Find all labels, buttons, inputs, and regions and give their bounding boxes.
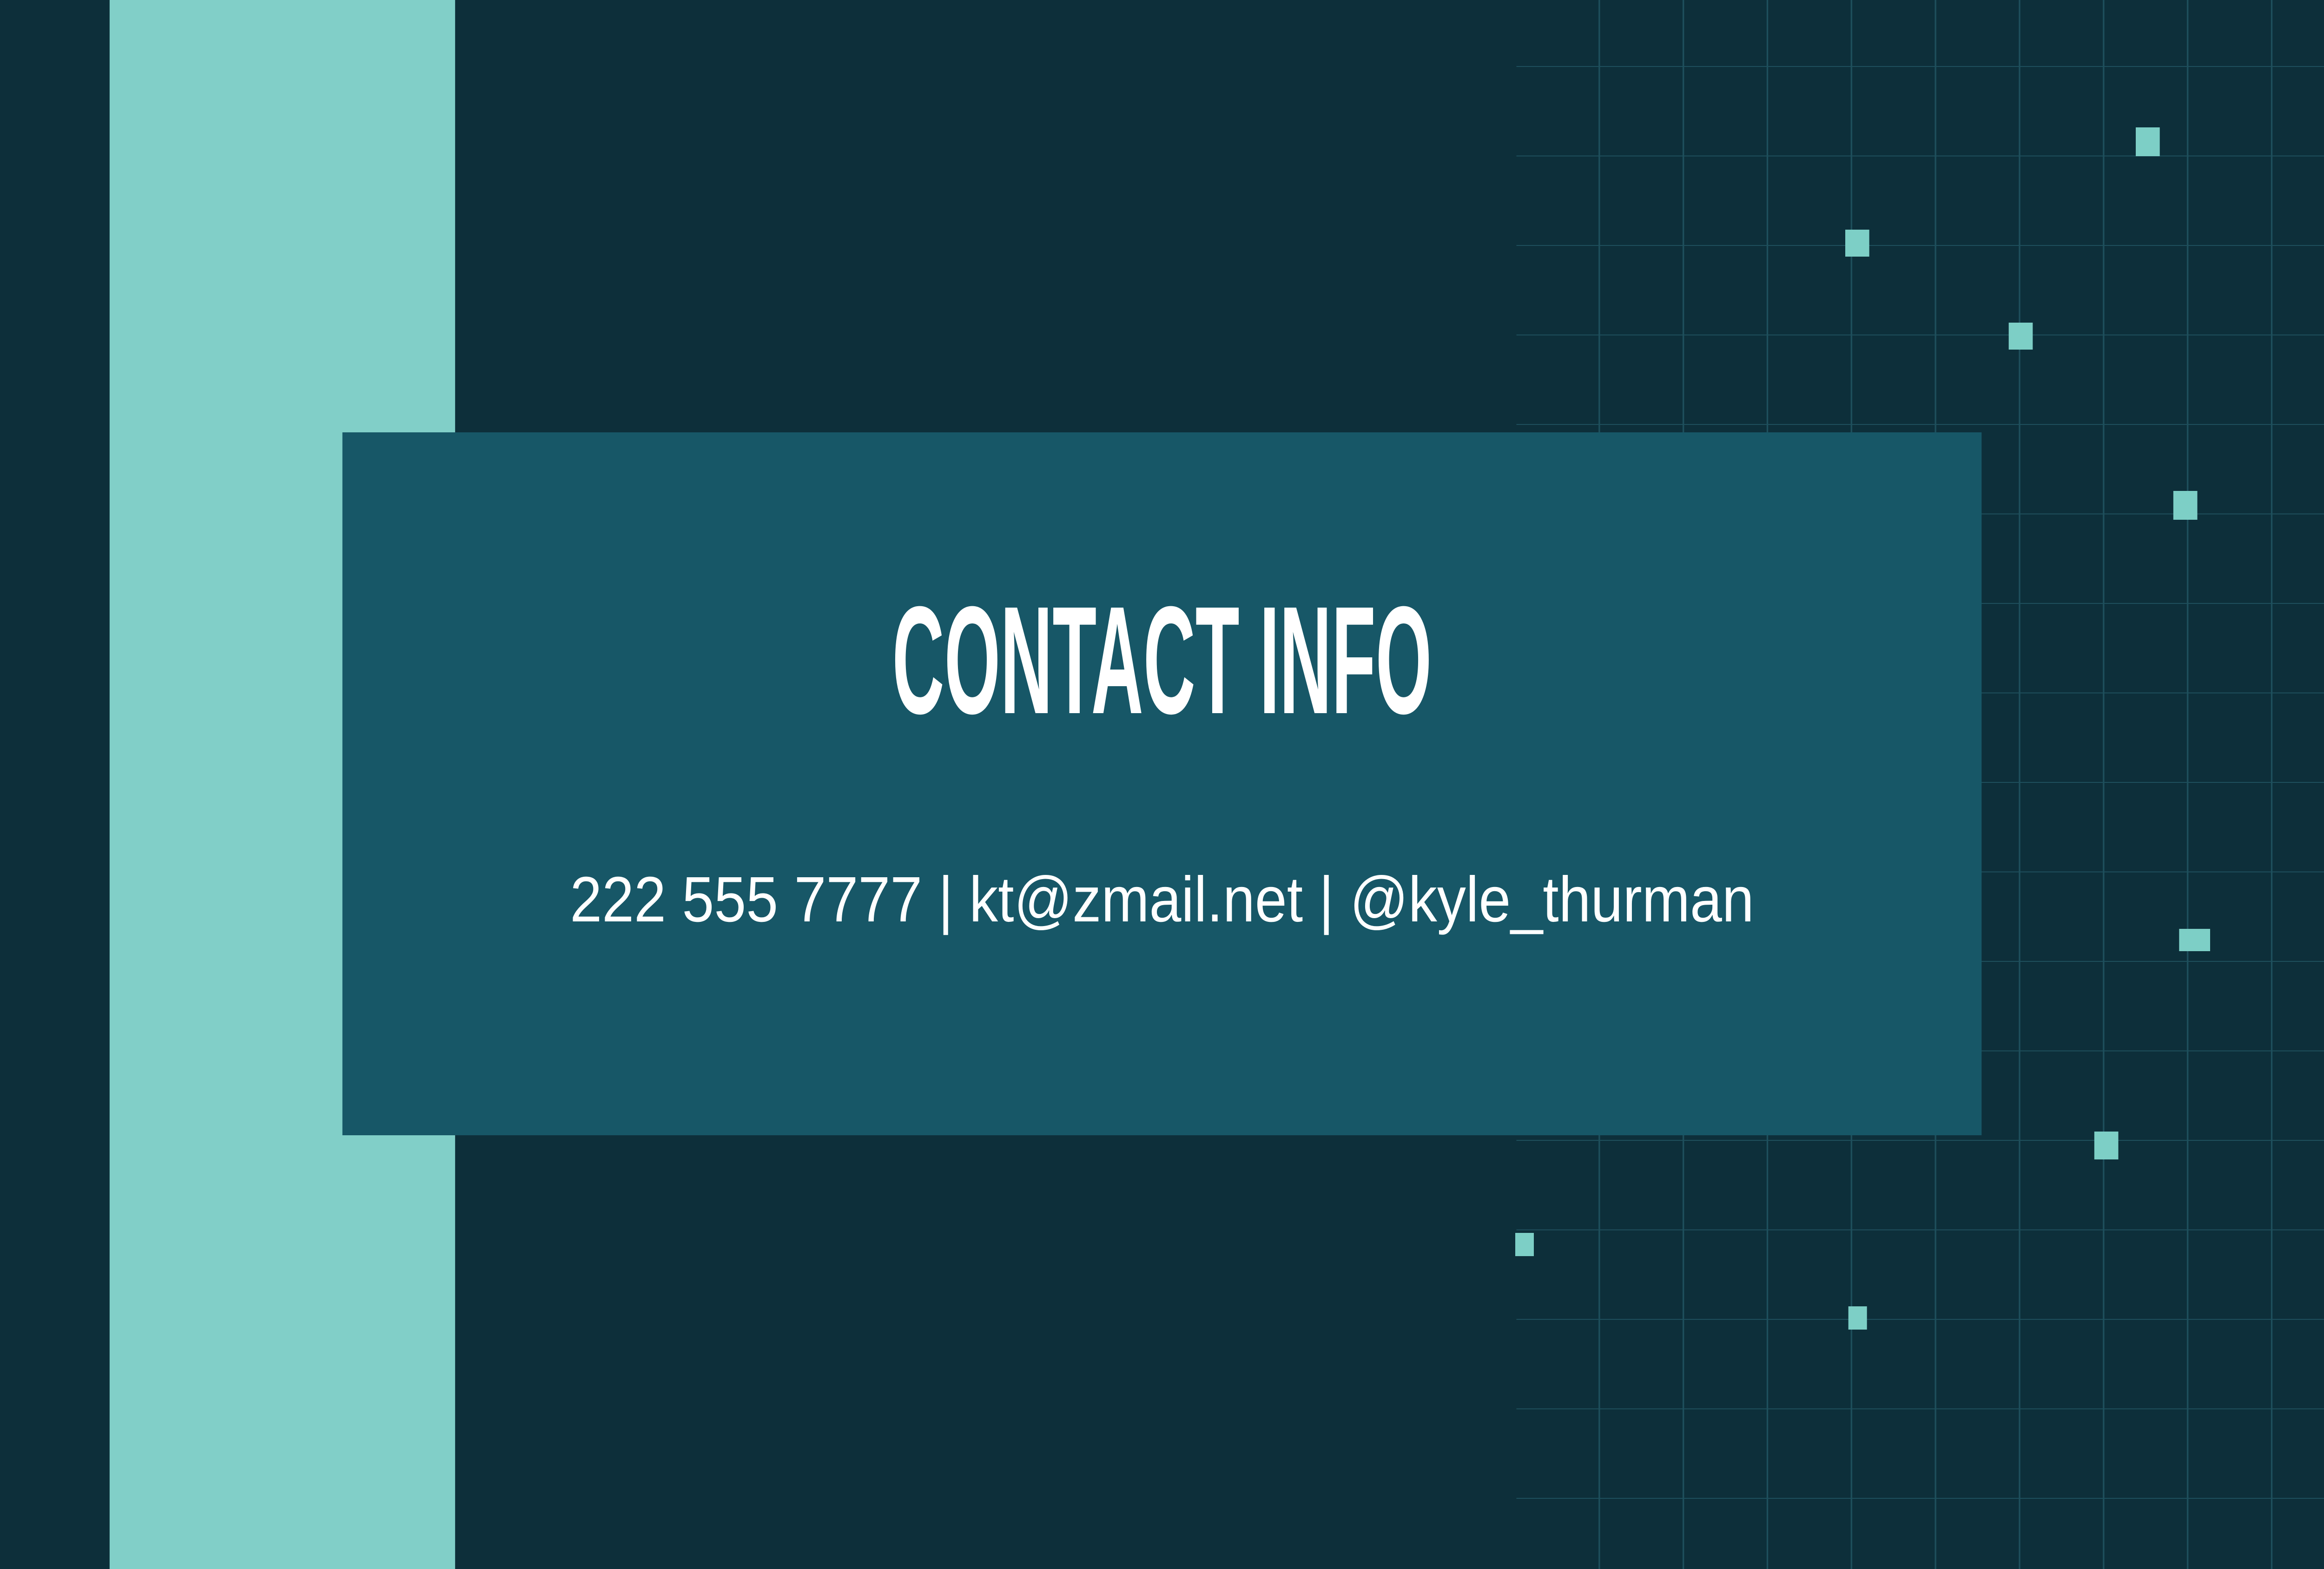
contact details: 222 555 7777 | kt@zmail.net | @kyle_thurman <box>570 863 1754 935</box>
decorative squares <box>1515 127 2210 1330</box>
background grid <box>1516 0 2324 1569</box>
title: CONTACT INFO <box>892 575 1432 746</box>
light teal stripe <box>110 0 455 1569</box>
panel: contact <box>343 432 1981 1135</box>
